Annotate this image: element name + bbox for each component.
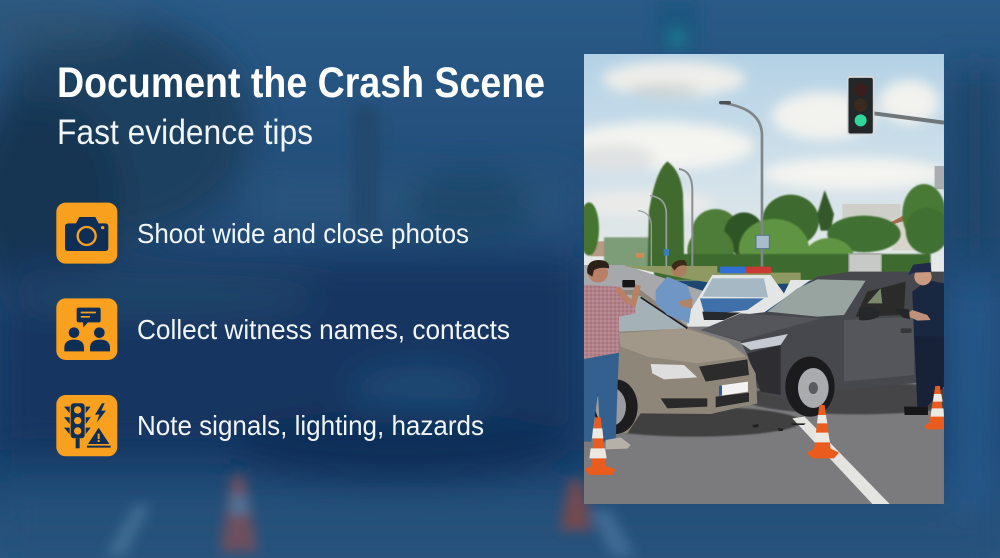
road line [792, 417, 891, 505]
debris [752, 423, 806, 431]
tip text: Shoot wide and close photos [137, 218, 469, 249]
tip 2: witnesses [56, 298, 510, 360]
traffic cone left [585, 417, 616, 475]
trees [579, 161, 949, 283]
road surfaces [584, 265, 703, 327]
traffic cone right [924, 386, 944, 429]
beige sedan [584, 290, 757, 434]
icon: witnesses talking [56, 298, 117, 360]
SUV wheel [785, 357, 835, 417]
traffic signal [848, 77, 944, 134]
icon: camera [56, 203, 117, 264]
tip 1: photos [56, 203, 469, 264]
police car [687, 267, 811, 327]
title: Document the Crash Scene [57, 59, 545, 107]
tip 3: signals [56, 395, 484, 456]
icon: traffic signal, lightning and hazard [56, 395, 117, 456]
subtitle: Fast evidence tips [57, 113, 313, 152]
man with phone [656, 260, 692, 323]
road and crash scene [584, 260, 971, 505]
police officer [900, 262, 944, 415]
photo: crash scene [584, 54, 944, 504]
grey SUV [701, 272, 944, 417]
street lamps [720, 103, 762, 267]
man photographing [584, 260, 638, 449]
sky and background scenery [564, 54, 949, 283]
buildings [935, 166, 944, 189]
traffic cone centre [807, 405, 839, 458]
tip text: Note signals, lighting, hazards [137, 410, 484, 441]
tip text: Collect witness names, contacts [137, 314, 510, 345]
sedan wheel [594, 379, 638, 434]
